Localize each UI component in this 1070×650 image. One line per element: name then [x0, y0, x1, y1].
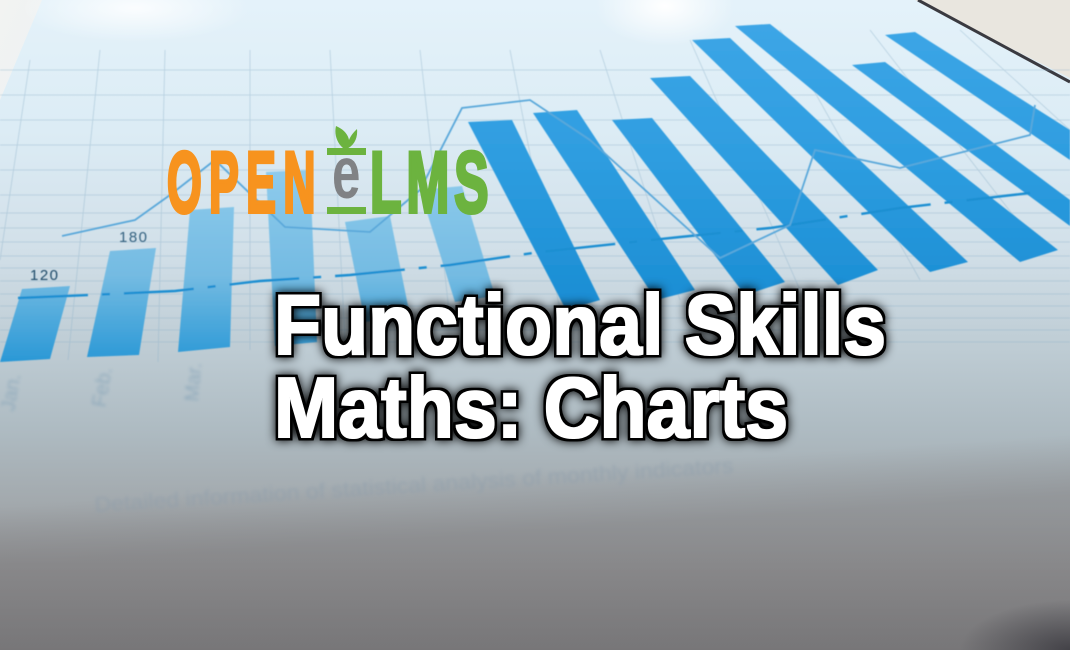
- background: top left paper corner: [0, 0, 42, 100]
- chart grid: [0, 30, 1070, 362]
- light glare top: [20, 0, 735, 45]
- logo word: OPEN: OPEN: [167, 134, 323, 231]
- blurred month labels: Feb.: [88, 366, 117, 409]
- logo letter: e with bars and leaves: e: [332, 133, 360, 214]
- bars: january to march: [0, 170, 495, 362]
- title: [274, 278, 886, 456]
- trend line: [18, 193, 1030, 298]
- blurred month labels: [0, 362, 206, 413]
- logo word: LMS: LMS: [370, 136, 493, 231]
- bar chart: [0, 24, 1070, 362]
- background: grey desk beyond the page edge: [0, 400, 1070, 650]
- dark corner bottom right: [960, 600, 1070, 650]
- title line 2: Maths: Charts: [274, 361, 788, 456]
- blurred month labels: Mar.: [181, 362, 206, 402]
- bars: april onwards: [468, 24, 1070, 310]
- blurred page sentence: Detailed information of statistical analysis of monthly indicators: [94, 455, 734, 517]
- logo letter: e with bars and leaves: [327, 126, 366, 214]
- title line 1: Functional Skills: [274, 278, 886, 373]
- background: tablet edge top right: [915, 0, 1070, 82]
- upper line: [62, 100, 1035, 258]
- logo: Open eLMS: [167, 126, 493, 231]
- value label: 120: 120: [30, 267, 60, 284]
- value label: 180: 180: [119, 229, 149, 246]
